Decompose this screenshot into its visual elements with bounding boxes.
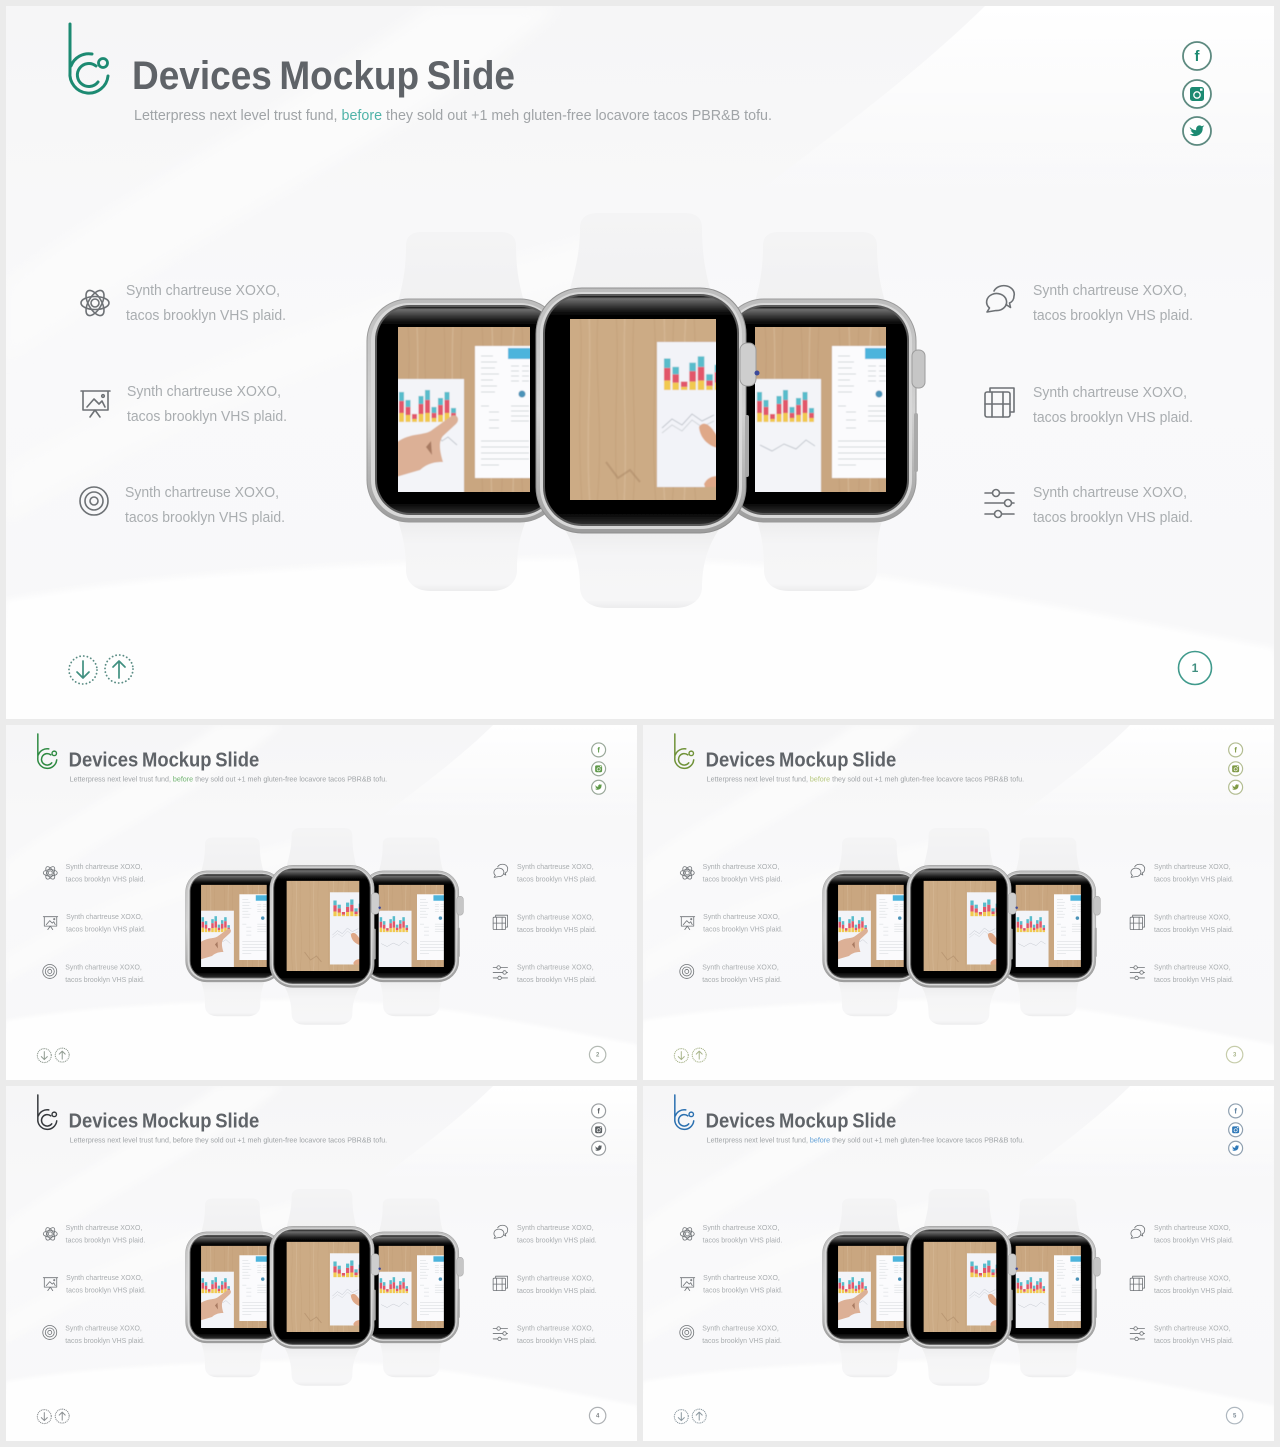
social icons <box>592 1104 606 1155</box>
title: Devices Mockup Slide <box>706 749 896 771</box>
social icons: f <box>1194 48 1200 65</box>
left features: Synth chartreuse XOXO, <box>702 962 779 971</box>
social icons: f <box>1234 1106 1237 1115</box>
page number <box>1226 1046 1243 1063</box>
left features: Synth chartreuse XOXO, <box>702 1323 779 1332</box>
navigation arrows <box>674 1048 706 1063</box>
right features: tacos brooklyn VHS plaid. <box>1154 874 1234 883</box>
right features: tacos brooklyn VHS plaid. <box>517 1286 597 1295</box>
title: Devices Mockup Slide <box>706 1110 896 1132</box>
right features: Synth chartreuse XOXO, <box>1154 1223 1231 1232</box>
navigation arrows <box>37 1409 69 1424</box>
right features: tacos brooklyn VHS plaid. <box>517 975 597 984</box>
left features: tacos brooklyn VHS plaid. <box>66 1286 146 1295</box>
slide background <box>635 1086 1280 1447</box>
left features: tacos brooklyn VHS plaid. <box>65 1336 145 1345</box>
left features: Synth chartreuse XOXO, <box>65 962 142 971</box>
page number: 5 <box>1233 1414 1237 1420</box>
watch mockups <box>186 1189 463 1386</box>
right features: Synth chartreuse XOXO, <box>1154 962 1231 971</box>
page number <box>589 1407 606 1424</box>
slide background <box>0 725 645 1090</box>
logo <box>675 1095 694 1129</box>
panel: slide 4 <box>0 1086 645 1447</box>
left features: Synth chartreuse XOXO, <box>127 383 281 400</box>
left features: Synth chartreuse XOXO, <box>126 282 280 299</box>
left features: Synth chartreuse XOXO, <box>66 862 142 871</box>
navigation arrows <box>37 1048 69 1063</box>
social icons <box>1229 1104 1243 1155</box>
social icons <box>592 743 606 794</box>
right features: tacos brooklyn VHS plaid. <box>1154 1286 1234 1295</box>
right features: tacos brooklyn VHS plaid. <box>517 925 597 934</box>
left features <box>43 862 146 984</box>
left features: tacos brooklyn VHS plaid. <box>66 1235 145 1244</box>
slide background <box>0 1086 645 1447</box>
left features: tacos brooklyn VHS plaid. <box>127 408 287 425</box>
right features: tacos brooklyn VHS plaid. <box>1154 975 1234 984</box>
right features: tacos brooklyn VHS plaid. <box>1033 409 1193 426</box>
left features: Synth chartreuse XOXO, <box>65 1323 142 1332</box>
right features: Synth chartreuse XOXO, <box>517 862 594 871</box>
left features <box>680 1223 783 1345</box>
left features: Synth chartreuse XOXO, <box>125 484 279 501</box>
right features: tacos brooklyn VHS plaid. <box>517 1336 597 1345</box>
navigation arrows <box>674 1409 706 1424</box>
left features: Synth chartreuse XOXO, <box>703 862 779 871</box>
right features: tacos brooklyn VHS plaid. <box>1033 509 1193 526</box>
right features: tacos brooklyn VHS plaid. <box>1154 1336 1234 1345</box>
left features: tacos brooklyn VHS plaid. <box>702 1336 782 1345</box>
left features: Synth chartreuse XOXO, <box>703 1223 779 1232</box>
subtitle: Letterpress next level trust fund, before they sold out +1 meh gluten-free locavore tacos PBR&B tofu. <box>707 1136 1024 1145</box>
left features: Synth chartreuse XOXO, <box>703 912 780 921</box>
page number <box>1178 652 1212 684</box>
page number <box>589 1046 606 1063</box>
page number: 1 <box>1192 661 1199 675</box>
left features: tacos brooklyn VHS plaid. <box>66 874 145 883</box>
left features: tacos brooklyn VHS plaid. <box>703 1286 783 1295</box>
left features: Synth chartreuse XOXO, <box>66 912 143 921</box>
left features: tacos brooklyn VHS plaid. <box>66 925 146 934</box>
left features: tacos brooklyn VHS plaid. <box>65 975 145 984</box>
subtitle: Letterpress next level trust fund, before they sold out +1 meh gluten-free locavore tacos PBR&B tofu. <box>134 107 772 124</box>
page number: 4 <box>596 1414 600 1420</box>
subtitle: Letterpress next level trust fund, before they sold out +1 meh gluten-free locavore tacos PBR&B tofu. <box>70 775 387 784</box>
panel: slide 5 <box>635 1086 1280 1447</box>
right features: Synth chartreuse XOXO, <box>1154 913 1231 922</box>
left features: Synth chartreuse XOXO, <box>66 1223 142 1232</box>
social icons <box>1229 743 1243 794</box>
right features: tacos brooklyn VHS plaid. <box>1033 307 1193 324</box>
logo <box>38 1095 57 1129</box>
slide background <box>635 725 1280 1090</box>
right features: tacos brooklyn VHS plaid. <box>1154 925 1234 934</box>
right features: Synth chartreuse XOXO, <box>1033 384 1187 401</box>
left features: tacos brooklyn VHS plaid. <box>703 925 783 934</box>
subtitle: Letterpress next level trust fund, before they sold out +1 meh gluten-free locavore tacos PBR&B tofu. <box>70 1136 387 1145</box>
logo <box>70 24 108 93</box>
right features: Synth chartreuse XOXO, <box>1154 1274 1231 1283</box>
left features: Synth chartreuse XOXO, <box>703 1273 780 1282</box>
right features <box>493 1223 597 1345</box>
social icons: f <box>1234 745 1237 754</box>
navigation arrows <box>69 655 133 684</box>
right features: Synth chartreuse XOXO, <box>517 962 594 971</box>
title: Devices Mockup Slide <box>132 54 515 98</box>
watch mockups <box>823 1189 1100 1386</box>
right features <box>985 282 1193 526</box>
left features <box>80 282 287 526</box>
left features: tacos brooklyn VHS plaid. <box>702 975 782 984</box>
subtitle: Letterpress next level trust fund, before they sold out +1 meh gluten-free locavore tacos PBR&B tofu. <box>707 775 1024 784</box>
social icons: f <box>597 1106 600 1115</box>
social icons: f <box>597 745 600 754</box>
panel: main slide <box>0 6 1280 740</box>
right features <box>1130 862 1234 984</box>
panel: slide 3 <box>635 725 1280 1090</box>
page number <box>1226 1407 1243 1424</box>
slide background <box>0 6 1280 740</box>
page number: 2 <box>596 1053 600 1059</box>
right features <box>493 862 597 984</box>
right features: tacos brooklyn VHS plaid. <box>517 1235 597 1244</box>
right features: tacos brooklyn VHS plaid. <box>517 874 597 883</box>
right features: tacos brooklyn VHS plaid. <box>1154 1235 1234 1244</box>
watch mockups <box>823 828 1100 1025</box>
panel: slide 2 <box>0 725 645 1090</box>
right features: Synth chartreuse XOXO, <box>517 1323 594 1332</box>
right features: Synth chartreuse XOXO, <box>517 1223 594 1232</box>
right features: Synth chartreuse XOXO, <box>517 1274 594 1283</box>
left features <box>43 1223 146 1345</box>
page number: 3 <box>1233 1053 1237 1059</box>
right features: Synth chartreuse XOXO, <box>1154 1323 1231 1332</box>
left features: Synth chartreuse XOXO, <box>66 1273 143 1282</box>
left features: tacos brooklyn VHS plaid. <box>126 307 286 324</box>
left features <box>680 862 783 984</box>
watch mockups <box>186 828 463 1025</box>
left features: tacos brooklyn VHS plaid. <box>703 874 782 883</box>
left features: tacos brooklyn VHS plaid. <box>125 509 285 526</box>
logo <box>38 734 57 768</box>
right features: Synth chartreuse XOXO, <box>1154 862 1231 871</box>
right features: Synth chartreuse XOXO, <box>1033 484 1187 501</box>
title: Devices Mockup Slide <box>69 1110 259 1132</box>
watch mockups <box>367 213 925 608</box>
right features: Synth chartreuse XOXO, <box>517 913 594 922</box>
title: Devices Mockup Slide <box>69 749 259 771</box>
right features: Synth chartreuse XOXO, <box>1033 282 1187 299</box>
right features <box>1130 1223 1234 1345</box>
logo <box>675 734 694 768</box>
social icons <box>1183 42 1211 145</box>
left features: tacos brooklyn VHS plaid. <box>703 1235 782 1244</box>
